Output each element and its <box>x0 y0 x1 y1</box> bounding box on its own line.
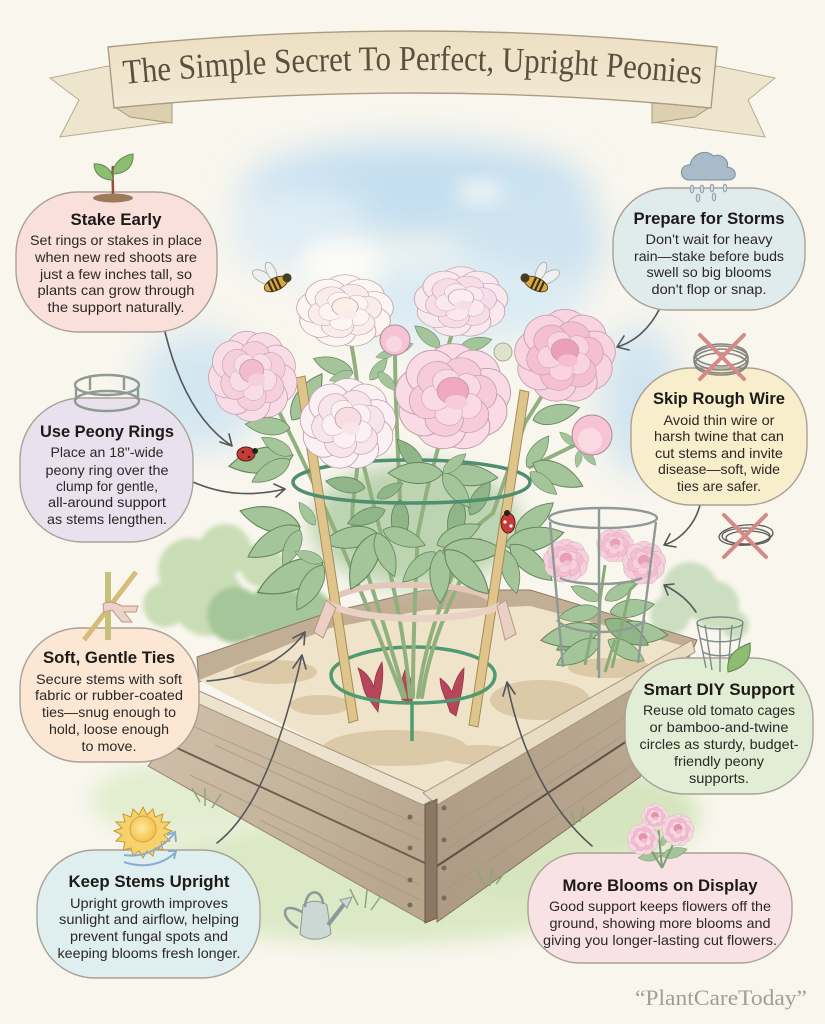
arrows <box>165 308 700 846</box>
bud: green <box>494 343 512 361</box>
grass tufts <box>192 788 584 910</box>
panel: use peony rings: Use Peony Rings <box>40 422 174 441</box>
flower: pale center <box>296 376 400 474</box>
panel: stake early: when new red shoots are <box>34 249 197 265</box>
leaves <box>227 321 587 615</box>
right wall <box>437 650 692 922</box>
flower: left pink <box>194 318 312 436</box>
panel: soft gentle ties: fabric or rubber-coated <box>35 687 183 703</box>
panel: soft gentle ties: hold, loose enough <box>49 721 169 737</box>
right ribbon tail <box>652 66 775 137</box>
soil patches <box>233 658 652 766</box>
panel: soft gentle ties: ties—snug enough to <box>42 704 176 720</box>
panel: prepare for storms: swell so big blooms <box>646 264 772 280</box>
grain lines <box>190 695 660 900</box>
right bamboo stake <box>469 390 529 727</box>
arrow: ties to tie <box>207 632 305 681</box>
tie tails <box>314 600 516 640</box>
panel: stake early: just a few inches tall, so <box>39 266 192 282</box>
title banner <box>49 30 776 138</box>
left wall seam <box>177 748 425 863</box>
bee right <box>518 255 565 298</box>
panel: keep stems upright <box>37 850 260 978</box>
panel: use peony rings: Place an 18"-wide <box>50 444 164 460</box>
grass ground wash <box>90 762 700 945</box>
panel: prepare for storms: don't flop or snap. <box>652 281 766 297</box>
banner face <box>108 31 717 108</box>
left wall <box>148 702 437 922</box>
icon: rain cloud <box>681 152 735 202</box>
panel: stake early: plants can grow through <box>38 282 194 298</box>
left fold <box>115 103 172 123</box>
left wall top rim <box>197 690 437 805</box>
small plant leaves <box>539 577 669 673</box>
arrow: stake early to plant <box>165 332 232 446</box>
panel: smart diy support: Smart DIY Support <box>644 680 795 699</box>
panel: more blooms on display <box>528 853 792 963</box>
foliage wash <box>310 463 520 587</box>
lower support ring front <box>331 675 495 741</box>
flower: pale top left <box>292 273 398 350</box>
panel: prepare for storms: Don't wait for heavy <box>646 231 772 247</box>
panel: more blooms on display: giving you longer-lasting cut flowers. <box>543 932 777 948</box>
ladybug on stake <box>501 510 515 533</box>
panel: keep stems upright: Keep Stems Upright <box>68 872 230 891</box>
left ribbon tail <box>50 66 172 137</box>
bolts <box>408 806 446 908</box>
icon: thin wire crossed <box>718 515 774 557</box>
soil <box>199 606 692 798</box>
bud: right pink <box>557 415 612 468</box>
watercolor sky <box>138 142 680 475</box>
small flowers <box>541 527 668 587</box>
icon: crossed bamboo with tie <box>84 572 138 640</box>
upper ring back <box>293 460 530 482</box>
icon: cage with leaf <box>697 617 750 672</box>
icon: sprout <box>93 154 133 202</box>
lower support ring back <box>331 647 495 675</box>
flower: main pink <box>390 341 516 455</box>
small stems <box>585 565 640 672</box>
panel: smart diy support: supports. <box>689 770 749 786</box>
panel: more blooms on display: More Blooms on Display <box>562 876 758 895</box>
back rim of bed <box>197 590 697 682</box>
arrow: wire to cage <box>664 505 700 547</box>
panel: stake early: Stake Early <box>70 210 162 229</box>
background shrubs <box>143 524 749 645</box>
stems <box>267 317 575 697</box>
panel: prepare for storms: rain—stake before buds <box>634 248 784 264</box>
left bamboo stake <box>296 376 358 723</box>
arrow: rings to ring <box>193 482 285 497</box>
panel: skip rough wire: harsh twine that can <box>654 428 784 444</box>
panel: keep stems upright: Upright growth improves <box>70 895 228 911</box>
upper ring front <box>293 482 530 503</box>
panel: use peony rings: clump for gentle, <box>56 478 158 494</box>
panel: smart diy support: or bamboo-and-twine <box>650 719 789 735</box>
icon: sun and breeze <box>114 807 176 865</box>
panel: more blooms on display: ground, showing more blooms and <box>550 915 770 931</box>
panel: smart diy support: circles as sturdy, budget- <box>640 736 799 752</box>
panel: keep stems upright: keeping blooms fresh longer. <box>58 945 240 961</box>
red shoots <box>358 662 464 716</box>
main peony plant <box>194 265 620 741</box>
panel: smart diy support <box>625 658 813 794</box>
panel: smart diy support: Reuse old tomato cages <box>643 702 795 718</box>
watermark: “PlantCareToday” <box>635 985 807 1010</box>
panel: skip rough wire: Skip Rough Wire <box>653 389 785 408</box>
panel: keep stems upright: prevent fungal spots and <box>70 928 228 944</box>
bee left <box>247 255 294 298</box>
panel: soft gentle ties: Soft, Gentle Ties <box>43 648 175 667</box>
panel: use peony rings <box>20 398 193 542</box>
flower: right pink <box>510 307 620 407</box>
icon: watering can <box>285 892 352 939</box>
panel: soft gentle ties: to move. <box>82 738 136 754</box>
pink tie loop front <box>326 603 500 618</box>
panel: smart diy support: friendly peony <box>674 753 764 769</box>
corner post <box>425 799 437 923</box>
panel: stake early <box>16 192 217 332</box>
panel: skip rough wire <box>631 368 807 505</box>
panel: soft gentle ties <box>20 628 199 762</box>
panel: stake early: Set rings or stakes in place <box>30 232 202 248</box>
small tomato-cage peony <box>539 507 669 678</box>
panel: skip rough wire: cut stems and invite <box>655 445 783 461</box>
title text: The Simple Secret To Perfect, Upright Peonies <box>122 46 700 84</box>
pink tie loop back <box>328 585 498 607</box>
arrow: storm to flower <box>617 308 660 350</box>
right fold <box>652 103 710 123</box>
ladybug on leaf <box>237 447 258 461</box>
panel: soft gentle ties: Secure stems with soft <box>36 671 182 687</box>
right wall seam <box>437 716 665 866</box>
panel: more blooms on display: Good support keeps flowers off the <box>549 898 771 914</box>
bud: top center <box>375 325 415 361</box>
panel: use peony rings: peony ring over the <box>46 462 169 478</box>
panel: skip rough wire: Avoid thin wire or <box>664 412 775 428</box>
icon: peony bouquet <box>626 803 695 868</box>
icon: wire coil crossed <box>694 335 748 379</box>
panel: skip rough wire: ties are safer. <box>677 478 761 494</box>
panel: prepare for storms <box>613 188 805 310</box>
arrow: DIY to small cage <box>664 584 696 612</box>
panel: stake early: the support naturally. <box>48 299 184 315</box>
cage wire <box>549 507 657 678</box>
right wall top rim <box>423 640 695 805</box>
flower: pale top right <box>410 265 512 340</box>
arrow: upright to stems <box>217 655 306 843</box>
panel: skip rough wire: disease—soft, wide <box>658 461 780 477</box>
arrow: blooms to display <box>503 682 592 846</box>
panel: prepare for storms: Prepare for Storms <box>634 209 784 228</box>
panel: use peony rings: all-around support <box>48 494 166 510</box>
raised wooden bed <box>148 590 697 923</box>
panel: keep stems upright: sunlight and airflow, helping <box>59 911 239 927</box>
panel: use peony rings: as stems lengthen. <box>47 511 167 527</box>
icon: peony ring <box>75 375 139 411</box>
